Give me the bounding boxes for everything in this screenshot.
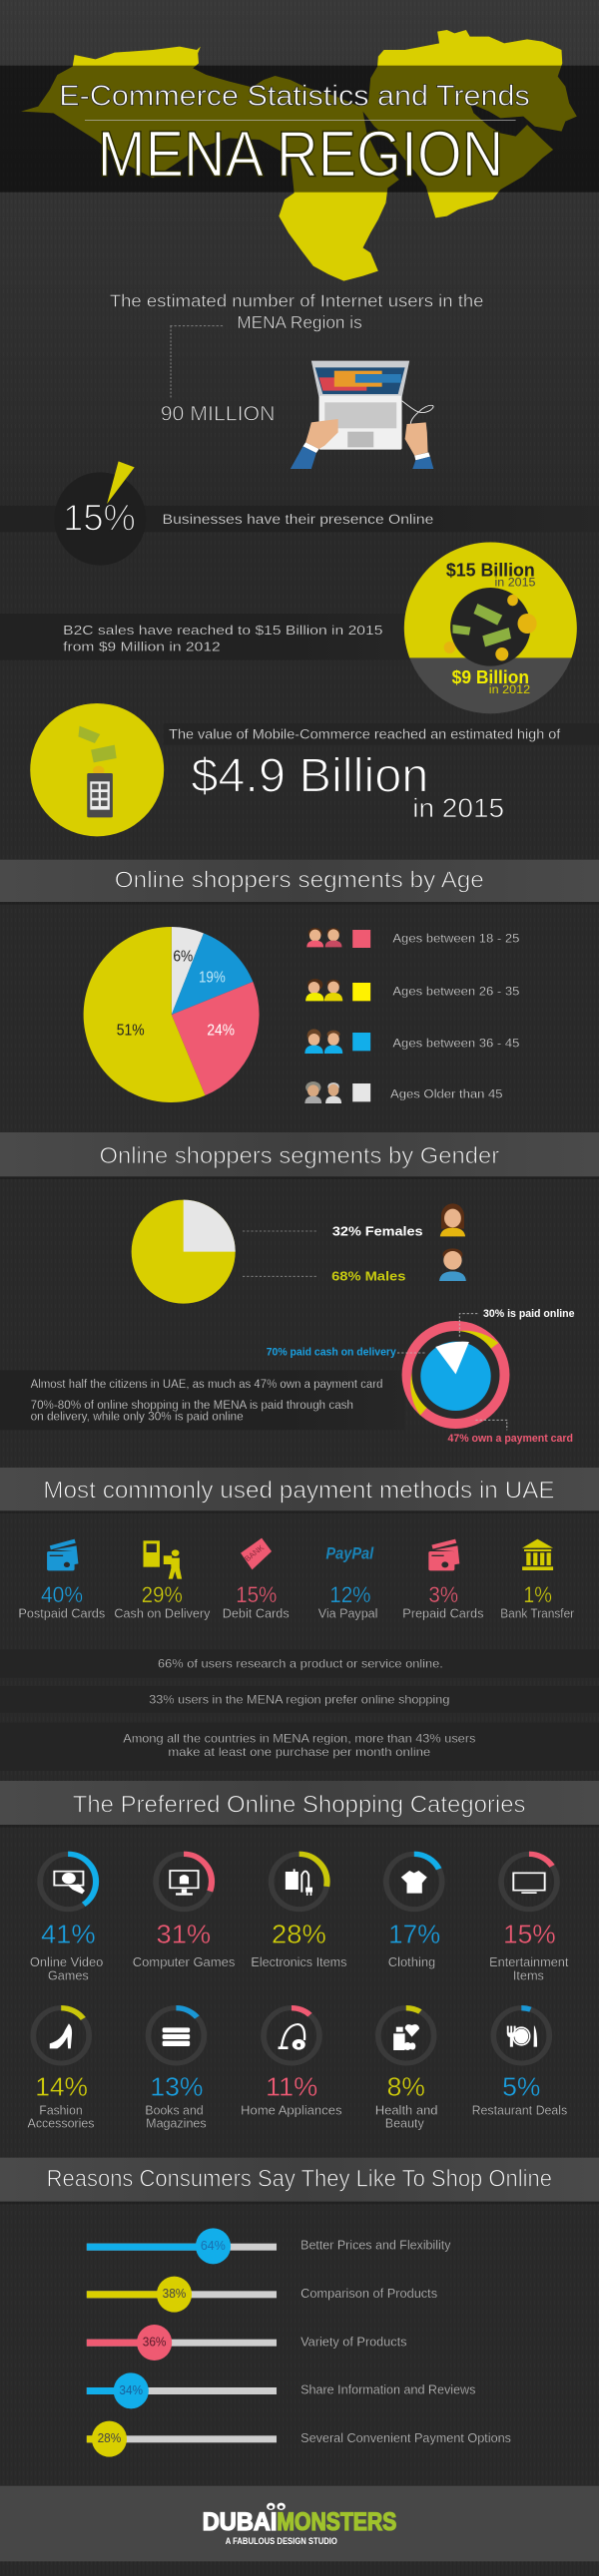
category: restaurant deals [472,2008,567,2117]
title [59,80,530,191]
internet users text: MENA Region is [237,312,362,332]
category: entertainment items: 15% [503,1920,556,1948]
donut chart: payment split [402,1321,509,1429]
legend: ages 26-35 [305,979,519,1001]
payment card text: on delivery, while only 30% is paid online [31,1409,244,1423]
category: clothing: 17% [388,1920,440,1948]
payment: paypal: PayPal [325,1543,374,1562]
stat: research online: 66% of users research a product or service online. [158,1657,443,1670]
slider: better prices 64%: 64% [201,2239,226,2253]
payment card text [31,1377,382,1423]
category: health and beauty [375,2008,438,2130]
stat: monthly purchase: Among all the countries in MENA region, more than 43% users [123,1732,476,1745]
B2C sales text [63,624,382,654]
heading: payment methods [0,1468,599,1513]
legend: ages 26-35: Ages between 26 - 35 [392,984,519,998]
payment: debit cards [223,1538,290,1620]
category: home appliances: Home Appliances [241,2103,342,2117]
B2C circle graphic: $9 Billion [452,667,529,688]
B2C circle graphic: in 2012 [489,682,530,696]
slider: share information 34%: Share Information and Reviews [300,2383,476,2396]
category: computer games: 31% [157,1920,211,1948]
mobile commerce circle graphic [30,703,164,836]
category: fashion accessories: 14% [35,2072,88,2101]
payment: cash on delivery: 29% [142,1583,183,1608]
category: restaurant deals: Restaurant Deals [472,2103,567,2117]
stat: monthly purchase: make at least one purchase per month online [168,1745,430,1759]
category: online video games: Games [48,1968,89,1982]
slider: payment options 28%: 28% [98,2431,121,2445]
legend: males [331,1248,466,1283]
payment card text: Almost half the citizens in UAE, as much as 47% own a payment card [31,1377,382,1391]
category: entertainment items: Items [513,1968,544,1982]
slider: comparison 38%: 38% [163,2287,186,2301]
payment: bank transfer: Bank Transfer [500,1607,575,1620]
payment: prepaid cards: Prepaid Cards [402,1607,484,1620]
category: online video games [30,1854,103,1982]
pie chart: gender [132,1200,236,1304]
category: electronics items [251,1854,347,1969]
payment: debit cards: BANK [243,1543,267,1563]
mobile commerce text: The value of Mobile-Commerce reached an estimated high of [169,727,561,742]
payment: paypal: 12% [329,1583,371,1608]
heading: segments by age [0,860,599,905]
payment: bank transfer: 1% [523,1583,552,1608]
category: entertainment items: Entertainment [489,1955,569,1969]
payment: debit cards: Debit Cards [223,1607,290,1620]
stat: prefer online shopping: 33% users in the MENA region prefer online shopping [149,1693,449,1706]
legend: ages 18-25: Ages between 18 - 25 [392,932,519,945]
legend: ages 36-45: Ages between 36 - 45 [392,1037,519,1050]
pie chart: age: 24% [207,1023,235,1039]
B2C circle graphic [404,542,577,713]
category: home appliances: 11% [266,2072,317,2101]
category: electronics items: Electronics Items [251,1955,347,1969]
footer logo panel [0,2486,599,2561]
category: health and beauty: 8% [387,2072,425,2101]
heading: segments by age: Online shoppers segments by Age [115,867,484,893]
category: health and beauty: Health and [375,2103,438,2117]
pie chart: age: 19% [199,969,226,986]
slider: better prices 64%: Better Prices and Flexibility [300,2239,451,2252]
donut label: payment card: 47% own a payment card [447,1434,573,1445]
category: fashion accessories: Accessories [28,2117,95,2130]
payment: debit cards: 15% [236,1583,277,1608]
footer logo panel: A FABULOUS DESIGN STUDIO [226,2537,337,2547]
internet users text: The estimated number of Internet users in the [110,291,483,310]
category: clothing: Clothing [388,1955,435,1969]
legend: ages 18-25 [306,928,519,948]
heading: segments by gender: Online shoppers segments by Gender [99,1143,499,1169]
payment: postpaid cards: 40% [41,1583,83,1608]
heading: preferred categories [0,1781,599,1828]
category: computer games: Computer Games [133,1955,236,1969]
payment: cash on delivery: Cash on Delivery [114,1607,211,1620]
payment: postpaid cards: Postpaid Cards [18,1607,105,1620]
category: books and magazines: 13% [150,2072,204,2101]
stat: monthly purchase [123,1732,476,1759]
slider: share information 34%: 34% [119,2383,143,2397]
legend: ages older than 45 [304,1081,503,1103]
payment: paypal: Via Paypal [318,1607,377,1620]
category: fashion accessories: Fashion [39,2103,83,2117]
slider: variety 36%: Variety of Products [300,2335,407,2349]
footer logo panel: DUBAI [203,2508,277,2536]
mobile commerce text: in 2015 [412,794,504,823]
map of the MENA region [21,30,577,281]
payment: prepaid cards [402,1539,484,1620]
category: fashion accessories [28,2008,95,2130]
B2C sales text: B2C sales have reached to $15 Billion in 2015 [63,624,382,639]
payment card text: 70%-80% of online shopping in the MENA is paid through cash [31,1398,353,1412]
donut label: paid online: 30% is paid online [483,1309,575,1320]
15% statistic [54,461,146,566]
slider: comparison 38% [87,2277,437,2313]
category: computer games [133,1854,236,1969]
payment: cash on delivery [114,1540,211,1620]
category: home appliances [241,2008,342,2117]
15% statistic: 15% [63,498,136,539]
slider: payment options 28% [87,2421,511,2457]
icon: laptop and hands [291,361,433,469]
pie chart: age [84,927,260,1102]
slider: share information 34% [87,2372,476,2408]
category: books and magazines: Magazines [146,2117,207,2130]
category: clothing [386,1854,442,1969]
B2C sales text: from $9 Million in 2012 [63,641,221,654]
heading: preferred categories: The Preferred Online Shopping Categories [73,1792,526,1818]
payment: prepaid cards: 3% [428,1583,458,1608]
payment: paypal [318,1543,377,1620]
category: entertainment items [489,1854,569,1982]
heading: segments by gender [0,1132,599,1179]
title: E-Commerce Statistics and Trends [59,80,530,112]
category: books and magazines [145,2008,207,2130]
legend: females: 32% Females [332,1224,423,1238]
category: online video games: 41% [41,1920,96,1948]
title band [0,66,599,193]
donut label: cash on delivery: 70% paid cash on delivery [267,1347,396,1358]
payment: postpaid cards [18,1539,105,1620]
B2C circle graphic: in 2015 [495,576,535,589]
B2C circle graphic: $15 Billion [446,561,535,581]
category: electronics items: 28% [272,1920,326,1948]
heading: reasons to shop online [0,2158,599,2204]
category: restaurant deals: 5% [502,2072,540,2101]
legend: ages older than 45: Ages Older than 45 [390,1087,503,1100]
slider: better prices 64% [87,2228,451,2264]
payment: bank transfer [500,1539,575,1620]
pie chart: age: 51% [117,1023,145,1039]
category: health and beauty: Beauty [385,2117,424,2130]
category: online video games: Online Video [30,1955,103,1969]
mobile commerce text [169,727,561,823]
slider: payment options 28%: Several Convenient Payment Options [300,2431,511,2445]
legend: ages 36-45 [304,1029,519,1054]
slider: comparison 38%: Comparison of Products [300,2287,437,2301]
internet users text [110,291,483,332]
legend: males: 68% Males [331,1270,406,1283]
pie chart: age: 6% [173,948,194,965]
businesses online text: Businesses have their presence Online [163,512,433,528]
slider: variety 36%: 36% [143,2335,166,2349]
slider: variety 36% [87,2325,407,2361]
footer logo panel: MONSTERS [277,2508,396,2536]
category: books and magazines: Books and [145,2103,204,2117]
mobile commerce text: $4.9 Billion [191,749,428,802]
90 million figure: 90 MILLION [161,401,276,425]
legend: females [332,1203,465,1238]
